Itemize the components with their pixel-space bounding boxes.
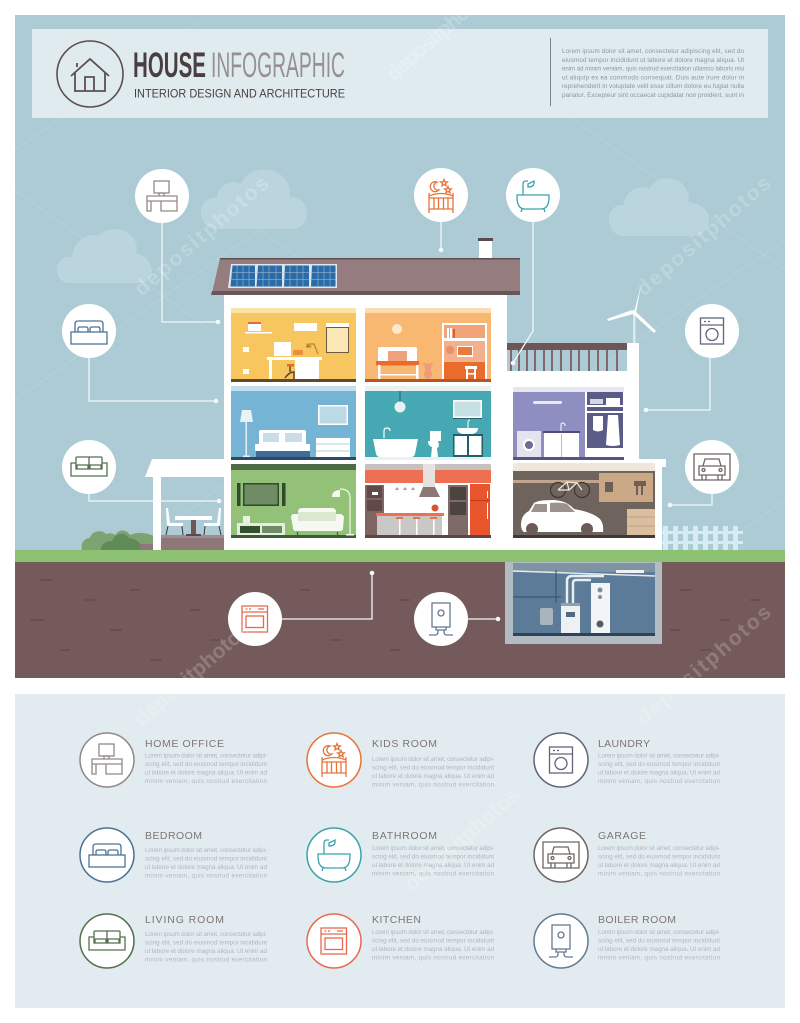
legend: laundry: Lorem ipsum dolor sit amet, consectetur adipi-: [598, 752, 720, 760]
legend: home office: scing elit, sed do eiusmod tempor incididunt: [145, 761, 267, 768]
watermarks: depositphotos: [632, 172, 776, 301]
chimney: [478, 238, 493, 259]
callout: boiler room: [414, 592, 468, 646]
legend: kitchen: KITCHEN: [372, 914, 421, 926]
callout: kids room: [414, 168, 468, 222]
legend: living room: LIVING ROOM: [145, 914, 224, 926]
legend: laundry: scing elit, sed do eiusmod tempor incididunt: [598, 761, 720, 768]
header house emblem: [57, 41, 123, 107]
legend: kids room: scing elit, sed do eiusmod tempor incididunt: [372, 764, 494, 772]
bushes: [82, 530, 154, 550]
legend: living room: [80, 914, 267, 968]
boiler room: [505, 562, 662, 644]
legend: garage: ut labore et dolore magna aliqua. Ut enim ad: [598, 862, 720, 869]
header paragraph: enim ad minim veniam, quis nostrud exercitation ullamco laboris nisi: [562, 66, 744, 72]
callout: garage: [685, 440, 739, 494]
legend: home office: minim veniam, quis nostrud exercitation: [145, 778, 267, 785]
background watermark lines: [15, 20, 785, 690]
callout: bathroom: [506, 168, 560, 222]
cloud right: [609, 178, 709, 236]
legend: laundry: [534, 733, 720, 787]
watermarks: depositphotos: [400, 783, 525, 896]
title: INFOGRAPHIC: [211, 46, 345, 85]
watermarks: [130, 0, 776, 896]
legend: boiler room: ut labore et dolore magna aliqua. Ut enim ad: [598, 946, 720, 953]
cloud left: [57, 229, 152, 283]
legend: kids room: ut labore et dolore magna aliqua. Ut enim ad: [372, 773, 494, 780]
legend: home office: Lorem ipsum dolor sit amet, consectetur adipi-: [145, 752, 267, 760]
legend: bathroom: minim veniam, quis nostrud exercitation: [372, 870, 494, 878]
balcony railing: [507, 343, 627, 371]
legend: garage: Lorem ipsum dolor sit amet, consectetur adipi-: [598, 845, 720, 852]
watermarks: depositphotos: [130, 172, 274, 301]
legend: bedroom: BEDROOM: [145, 830, 202, 842]
legend: bedroom: Lorem ipsum dolor sit amet, consectetur adipi-: [145, 847, 267, 854]
pergola: [140, 459, 224, 550]
legend: boiler room: BOILER ROOM: [598, 914, 676, 926]
legend: living room: scing elit, sed do eiusmod tempor incididunt: [145, 940, 267, 946]
legend: kitchen: ut labore et dolore magna aliqua. Ut enim ad: [372, 946, 494, 953]
fence: [662, 526, 743, 550]
sky panel: [15, 15, 785, 555]
legend: bedroom: minim veniam, quis nostrud exercitation: [145, 872, 267, 880]
legend: kitchen: Lorem ipsum dolor sit amet, consectetur adipi-: [372, 929, 494, 936]
legend: kids room: [307, 733, 494, 788]
room: bathroom: [365, 386, 491, 460]
legend: boiler room: scing elit, sed do eiusmod tempor incididunt: [598, 938, 720, 944]
legend: laundry: minim veniam, quis nostrud exercitation: [598, 778, 720, 785]
legend: living room: ut labore et dolore magna aliqua. Ut enim ad: [145, 948, 267, 955]
legend: bedroom: ut labore et dolore magna aliqua. Ut enim ad: [145, 864, 267, 871]
legend: kids room: KIDS ROOM: [372, 738, 437, 750]
legend: boiler room: minim veniam, quis nostrud exercitation: [598, 954, 720, 962]
header paragraph: reprehenderit in voluptate velit esse cillum dolore eu fugiat nulla: [562, 83, 745, 90]
legend: kitchen: scing elit, sed do eiusmod tempor incididunt: [372, 938, 494, 944]
room: living room: [231, 464, 356, 538]
legend: kids room: minim veniam, quis nostrud exercitation: [372, 782, 494, 788]
legend: kitchen: [307, 914, 494, 968]
header divider: [550, 38, 551, 106]
right wing: [507, 343, 666, 550]
legend: garage: scing elit, sed do eiusmod tempor incididunt: [598, 854, 720, 860]
ground: [15, 550, 785, 678]
watermarks: depositphotos: [632, 601, 776, 730]
header paragraph: eiusmod tempor incididunt ut labore et dolore magna aliqua. Ut: [562, 57, 744, 64]
legend: bathroom: Lorem ipsum dolor sit amet, consectetur adipi-: [372, 845, 494, 852]
garage room: [513, 463, 655, 538]
patio furniture: [166, 508, 221, 536]
cloud middle: [201, 169, 307, 229]
header paragraph: pariatur. Excepteur sint occaecat cupidatat non proident, sunt in: [562, 92, 744, 99]
room: home office: [231, 308, 356, 382]
legend: bathroom: [307, 828, 494, 882]
legend: boiler room: Lorem ipsum dolor sit amet, consectetur adipi-: [598, 929, 720, 936]
room: bedroom: [231, 386, 356, 460]
legend: bathroom: scing elit, sed do eiusmod tempor incididunt: [372, 854, 494, 860]
callout: home office: [135, 169, 189, 223]
legend: bathroom: ut labore et dolore magna aliqua. Ut enim ad: [372, 862, 494, 869]
header paragraph: ut aliquip ex ea commodo consequat. Duis aute irure dolor in: [562, 74, 744, 82]
header paragraph: Lorem ipsum dolor sit amet, consectetur adipiscing elit, sed do: [562, 48, 744, 55]
legend: boiler room: [534, 914, 720, 968]
legend: kitchen: minim veniam, quis nostrud exercitation: [372, 954, 494, 962]
connector end dots: [214, 248, 672, 621]
legend: kids room: Lorem ipsum dolor sit amet, consectetur adipi-: [372, 756, 494, 763]
legend: home office: ut labore et dolore magna aliqua. Ut enim ad: [145, 770, 267, 776]
wind turbine: [607, 285, 656, 344]
car: [521, 500, 603, 535]
callout: living room: [62, 440, 116, 494]
room: kids room: [365, 308, 491, 382]
header panel: [32, 29, 768, 118]
callout: laundry: [685, 304, 739, 358]
title: HOUSE: [133, 46, 206, 85]
title: [133, 46, 345, 85]
legend: home office: [80, 733, 267, 787]
roof: [211, 258, 520, 295]
legend: garage: [534, 828, 720, 882]
connector lines: [89, 222, 712, 619]
legend: bedroom: [80, 828, 267, 882]
legend: laundry: ut labore et dolore magna aliqua. Ut enim ad: [598, 770, 720, 776]
legend panel: [15, 694, 785, 1008]
header paragraph: [562, 48, 745, 99]
main house body: [224, 294, 507, 550]
legend: laundry: LAUNDRY: [598, 738, 650, 750]
legend: living room: Lorem ipsum dolor sit amet, consectetur adipi-: [145, 931, 267, 938]
watermarks: depositphotos: [130, 618, 255, 731]
legend: home office: HOME OFFICE: [145, 738, 224, 750]
room: kitchen: [365, 464, 491, 538]
solar panels: [228, 264, 337, 288]
laundry room: [513, 387, 624, 460]
legend: bedroom: scing elit, sed do eiusmod tempor incididunt: [145, 856, 267, 862]
legend: bathroom: BATHROOM: [372, 830, 437, 842]
legend: garage: minim veniam, quis nostrud exercitation: [598, 870, 720, 878]
callout: bedroom: [62, 304, 116, 358]
callout: kitchen: [228, 592, 282, 646]
legend: garage: GARAGE: [598, 830, 646, 842]
legend: living room: minim veniam, quis nostrud exercitation: [145, 956, 267, 964]
subtitle: INTERIOR DESIGN AND ARCHITECTURE: [134, 86, 345, 100]
